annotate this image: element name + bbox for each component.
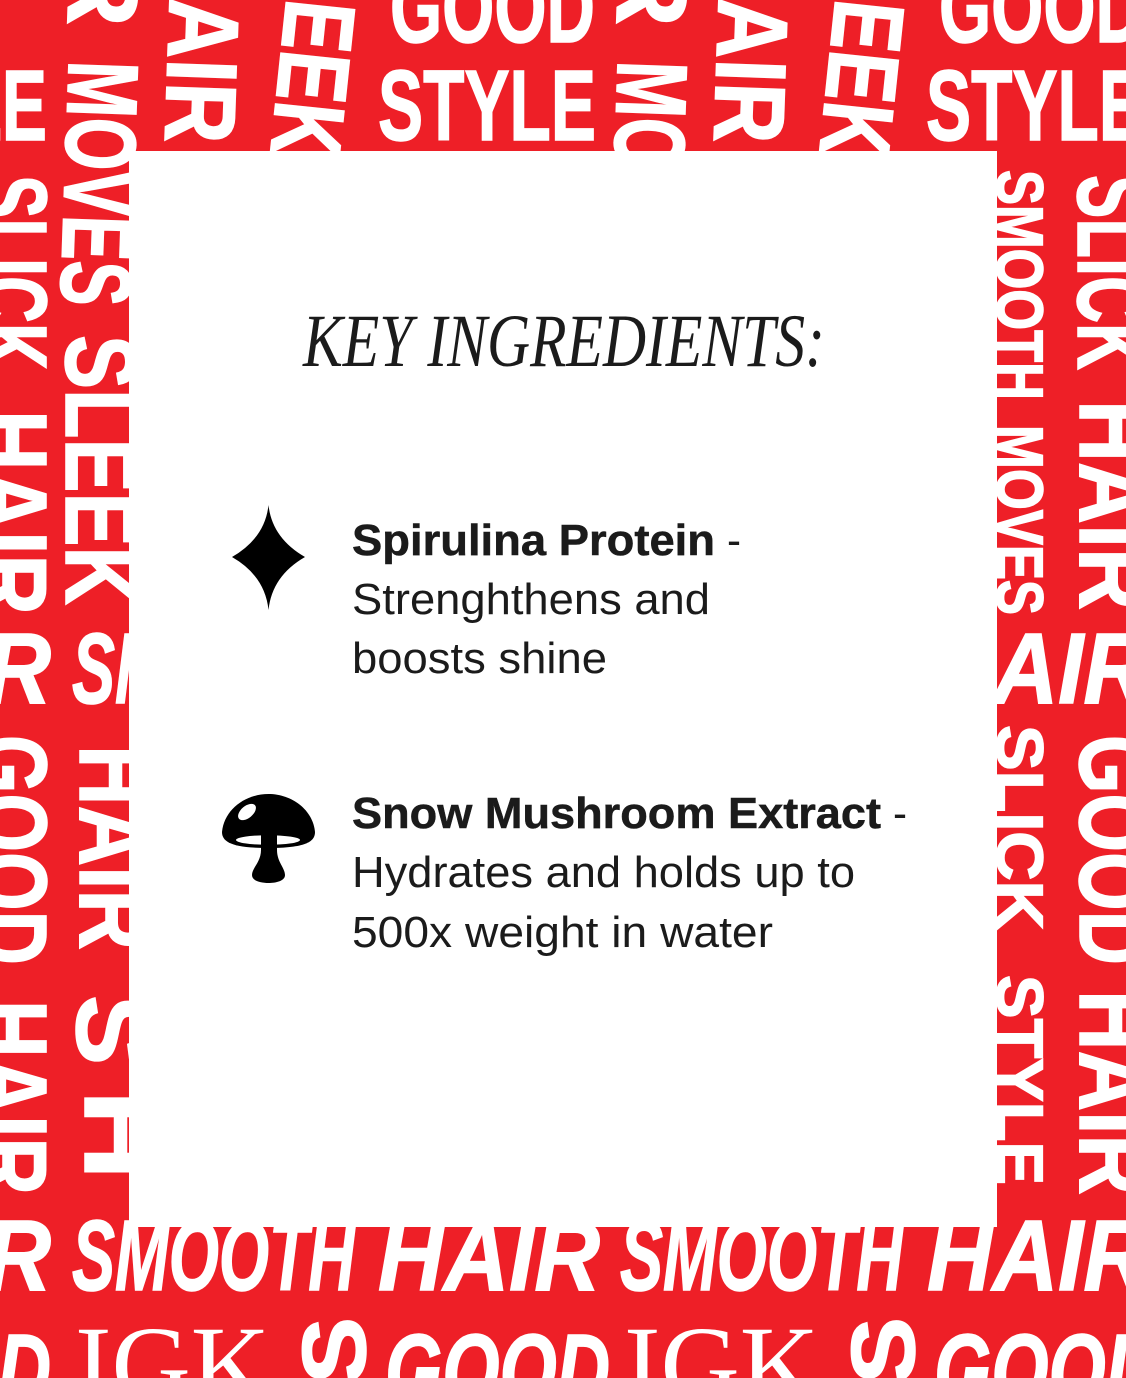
middle row: smooth hair — [0, 613, 1126, 725]
icon: mushroom — [222, 794, 315, 883]
bottom rows: HAIR — [378, 1200, 600, 1312]
left columns: SLEEK — [44, 335, 156, 605]
bottom rows: SMOOTH — [620, 1200, 904, 1312]
right columns: STYLE — [983, 975, 1057, 1185]
top rows — [0, 0, 1126, 308]
top rows: MOVES — [587, 59, 708, 308]
text block: spirulina protein: - — [727, 516, 741, 565]
text block: spirulina protein: boosts shine — [352, 634, 607, 683]
text block: spirulina protein: Strenghthens and — [352, 575, 710, 624]
text block: snow mushroom extract: Hydrates and holds up to — [352, 848, 855, 897]
title: KEY INGREDIENTS: — [302, 300, 825, 383]
right columns: SMOOTH — [983, 170, 1057, 400]
icon: four-point star — [232, 505, 305, 610]
text block: snow mushroom extract: 500x weight in water — [352, 908, 773, 957]
text block: spirulina protein: Spirulina Protein — [352, 516, 715, 565]
left columns — [0, 175, 175, 1195]
text block: snow mushroom extract — [352, 789, 907, 957]
bottom rows — [0, 1200, 1126, 1378]
right columns: MOVES — [983, 425, 1057, 615]
text block: snow mushroom extract: Snow Mushroom Extract — [352, 789, 881, 838]
middle row: smooth hair: SMOOTH — [620, 613, 904, 725]
left columns: H — [63, 1090, 175, 1180]
left columns: S — [55, 995, 167, 1065]
left columns: HAIR — [58, 745, 170, 950]
text block: snow mushroom extract: - — [893, 789, 907, 838]
middle row: smooth hair: SMOOTH — [72, 613, 356, 725]
bottom rows: SMOOTH — [72, 1200, 356, 1312]
top rows: MOVES — [38, 59, 159, 308]
top rows: STYLE — [378, 50, 596, 162]
panel: white card — [129, 151, 997, 1227]
text block: spirulina protein — [352, 516, 741, 683]
right columns — [983, 170, 1126, 1195]
middle row: smooth hair: HAIR — [378, 613, 600, 725]
right columns: SLICK — [983, 725, 1057, 930]
